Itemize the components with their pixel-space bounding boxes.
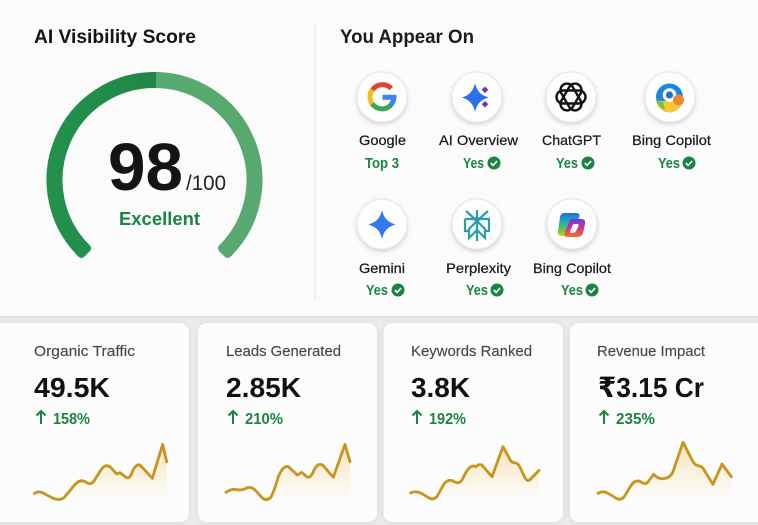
sparkline: [411, 447, 539, 502]
metric title: Leads Generated: [226, 344, 341, 360]
label: ChatGPT: [542, 132, 601, 148]
icon: AI sparkle: [464, 85, 488, 110]
label: Google: [359, 132, 406, 148]
label: Bing Copilot: [632, 132, 711, 148]
icon: Perplexity mark: [465, 210, 489, 241]
status: Yes: [463, 155, 484, 172]
sparkline: [226, 444, 350, 502]
metric value: 2.85K: [226, 372, 301, 403]
sparkline: [34, 444, 167, 502]
status: Yes: [561, 282, 583, 299]
heading: AI Visibility Score: AI Visibility Score: [34, 26, 196, 48]
gauge: score 98 of 100: [55, 80, 254, 260]
platform: Google: [357, 72, 407, 172]
icon: Google G: [370, 85, 394, 109]
metric change: [600, 411, 655, 428]
score rating: Excellent: [119, 208, 200, 229]
platform: ChatGPT: [542, 72, 601, 172]
platform: AI Overview: [439, 72, 519, 172]
label: Perplexity: [446, 260, 511, 276]
metric title: Organic Traffic: [34, 344, 135, 360]
platform: Gemini: [357, 199, 407, 299]
icon: ChatGPT knot: [556, 81, 586, 113]
label: AI Overview: [439, 132, 519, 148]
metric change: [36, 411, 90, 428]
platform: Bing Copilot: [632, 72, 711, 172]
card: Keywords Ranked: [384, 323, 563, 522]
card: Revenue Impact: [570, 323, 758, 522]
metric change: 210%: [245, 411, 283, 428]
icon: Gemini star: [370, 212, 394, 237]
score maximum: /100: [186, 172, 226, 195]
heading: You Appear On: You Appear On: [340, 27, 474, 48]
metric change: [412, 411, 466, 428]
status: Yes: [658, 155, 680, 172]
metric change: 158%: [53, 411, 90, 428]
card: Organic Traffic: [0, 323, 189, 522]
label: Bing Copilot: [533, 260, 611, 276]
icon: Bing Copilot ring: [656, 84, 684, 113]
card: Leads Generated: [198, 323, 377, 522]
metric title: Keywords Ranked: [411, 344, 532, 360]
panel: top summary: [0, 0, 758, 316]
metric change: 192%: [429, 411, 466, 428]
platform: Perplexity: [446, 199, 511, 299]
icon: Copilot mark: [558, 213, 585, 237]
status: Yes: [466, 282, 488, 299]
metric change: [228, 411, 283, 428]
metric value: 49.5K: [34, 372, 110, 403]
sparkline: [598, 442, 731, 502]
metric value: ₹3.15 Cr: [598, 372, 704, 403]
label: Gemini: [359, 260, 405, 276]
platform: Bing Copilot second: [533, 199, 611, 299]
metric value: 3.8K: [411, 372, 470, 403]
status: Top 3: [365, 155, 399, 172]
metric title: Revenue Impact: [597, 344, 705, 360]
status: Yes: [366, 282, 388, 299]
status: Yes: [556, 155, 578, 172]
score value: 98: [108, 130, 183, 205]
metric change: 235%: [616, 411, 655, 428]
